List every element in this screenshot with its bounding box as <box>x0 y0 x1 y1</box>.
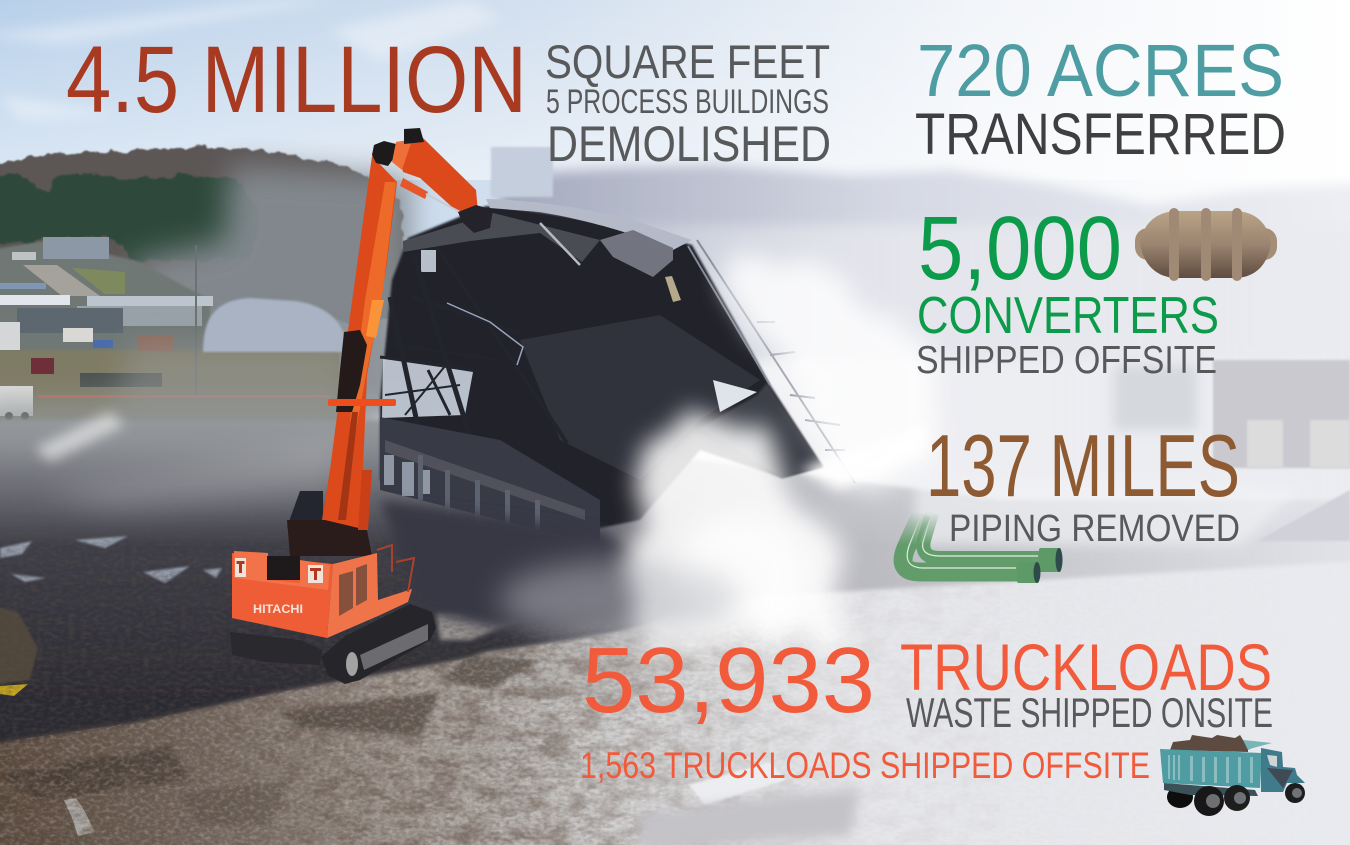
water spray <box>35 260 940 640</box>
icon: dump truck <box>1160 735 1305 816</box>
upper pipe <box>923 513 1042 558</box>
lawn fog <box>110 345 350 430</box>
roof debris beam <box>540 223 580 265</box>
site mid ground <box>0 240 210 360</box>
dark trees <box>0 172 258 262</box>
stat: 53,933 truckloads <box>580 628 1273 786</box>
lower pipe <box>903 513 1020 572</box>
generator shadow <box>640 790 860 845</box>
machine deck dark <box>287 520 372 556</box>
demolished: DEMOLISHED <box>547 116 831 172</box>
ground edge fog <box>0 400 380 450</box>
white pipe in frame <box>447 303 523 365</box>
rear shadow wheel <box>1167 786 1193 808</box>
cab window <box>1267 755 1277 767</box>
boom highlight <box>350 182 396 430</box>
boom bright patch <box>366 300 384 338</box>
shipped offsite: SHIPPED OFFSITE <box>916 339 1217 382</box>
side panel <box>327 553 412 638</box>
brush pile <box>0 605 38 685</box>
front track <box>321 604 436 684</box>
number: 53,933 <box>582 628 875 732</box>
stat: 4.5 million square feet <box>66 27 831 172</box>
excavator <box>230 128 493 684</box>
stat: 5,000 converters <box>916 199 1219 382</box>
muddy foreground <box>0 560 1350 845</box>
hydraulic lines <box>336 330 367 412</box>
floor slab <box>385 440 585 520</box>
track wheel <box>346 652 358 676</box>
counterweight <box>287 491 323 527</box>
cirrus clouds <box>0 0 500 120</box>
left wooded hill <box>0 147 410 320</box>
process buildings: 5 PROCESS BUILDINGS <box>546 83 829 121</box>
cab vent <box>267 556 300 580</box>
truckloads: TRUCKLOADS <box>900 630 1272 704</box>
stat: 137 miles <box>926 416 1240 550</box>
lower wall grid <box>520 315 760 480</box>
pivot pin <box>328 399 396 406</box>
nozzle jet <box>800 425 925 490</box>
far hills <box>500 165 1350 360</box>
sky <box>0 0 1350 300</box>
lower floor band <box>380 417 600 545</box>
ground <box>0 420 1350 845</box>
light showing through frame <box>382 250 473 418</box>
concrete slab <box>403 213 600 262</box>
demolished building <box>380 199 855 630</box>
arm <box>396 138 478 216</box>
railing <box>377 545 414 592</box>
horizon haze <box>0 0 1350 180</box>
piping removed: PIPING REMOVED <box>949 508 1240 550</box>
transferred: TRANSFERRED <box>915 102 1286 167</box>
lower socket <box>1017 562 1039 583</box>
dump bed <box>1160 749 1262 788</box>
arm rod <box>426 194 460 212</box>
inflated dome <box>203 298 346 352</box>
upper pipe highlight <box>923 513 1038 556</box>
arm cylinder <box>400 178 428 199</box>
number: 5,000 <box>918 199 1122 299</box>
stat: 720 acres <box>915 29 1286 167</box>
main plume <box>610 400 850 640</box>
rear track <box>230 632 322 665</box>
boom line shading <box>338 412 358 520</box>
lower right block <box>700 383 823 478</box>
icon: pipes <box>903 513 1062 583</box>
square feet: SQUARE FEET <box>545 35 830 88</box>
site buildings and vehicles <box>0 237 330 420</box>
mud blotches and grit <box>0 630 848 845</box>
right haze wash <box>520 225 1350 845</box>
offsite truckloads: 1,563 TRUCKLOADS SHIPPED OFFSITE <box>580 745 1150 786</box>
converters: CONVERTERS <box>917 287 1219 345</box>
upper wall panel <box>600 230 673 277</box>
cab <box>1261 748 1305 792</box>
acres: 720 ACRES <box>917 29 1284 112</box>
base openings <box>384 455 430 496</box>
lit gravel <box>436 610 700 705</box>
white generator <box>689 762 786 805</box>
plume right of building <box>720 260 940 480</box>
background tower <box>491 147 553 197</box>
lower haze <box>500 560 740 640</box>
building mass <box>380 206 823 530</box>
chassis <box>1164 783 1258 796</box>
upper body rear face <box>232 553 333 638</box>
cab guard <box>1243 740 1272 750</box>
left mist <box>40 440 340 510</box>
mud ruts <box>0 655 540 825</box>
T logo right <box>308 565 323 583</box>
frame members <box>380 247 567 450</box>
ladder on facade <box>688 240 855 483</box>
icon: converter <box>1135 208 1277 281</box>
gap in lower wall <box>713 380 757 412</box>
plume core <box>670 515 810 635</box>
HITACHI label: HITACHI <box>253 602 303 616</box>
front wheel <box>1285 783 1305 803</box>
cylinder <box>358 470 372 530</box>
warehouse right <box>915 360 1350 545</box>
lower pipe highlight <box>907 513 1016 568</box>
load <box>1170 735 1248 752</box>
yellow debris <box>0 684 28 696</box>
hood shade <box>1267 768 1293 788</box>
vent grilles <box>339 564 367 616</box>
arm joint <box>392 140 412 170</box>
base columns <box>418 455 540 540</box>
upper socket <box>1039 548 1061 572</box>
shear jaw <box>458 205 493 233</box>
T logo left <box>235 558 246 577</box>
site haze behind trees <box>130 165 410 420</box>
top hoses <box>404 128 424 144</box>
pale cylinder <box>665 276 681 302</box>
concrete posts <box>64 798 95 836</box>
rubble slope <box>380 500 720 630</box>
left spray <box>35 412 125 462</box>
lawn <box>0 350 340 425</box>
boom <box>322 156 397 540</box>
track panel <box>360 624 428 670</box>
rear wheels <box>1194 786 1224 816</box>
snow patches <box>0 536 222 583</box>
roof band <box>486 199 692 250</box>
upper hoses <box>372 141 396 166</box>
number: 137 MILES <box>926 416 1240 515</box>
body top panel <box>234 551 330 590</box>
headline number: 4.5 MILLION <box>66 27 527 133</box>
bed ribs <box>1168 755 1253 783</box>
ground texture dark <box>0 536 810 845</box>
